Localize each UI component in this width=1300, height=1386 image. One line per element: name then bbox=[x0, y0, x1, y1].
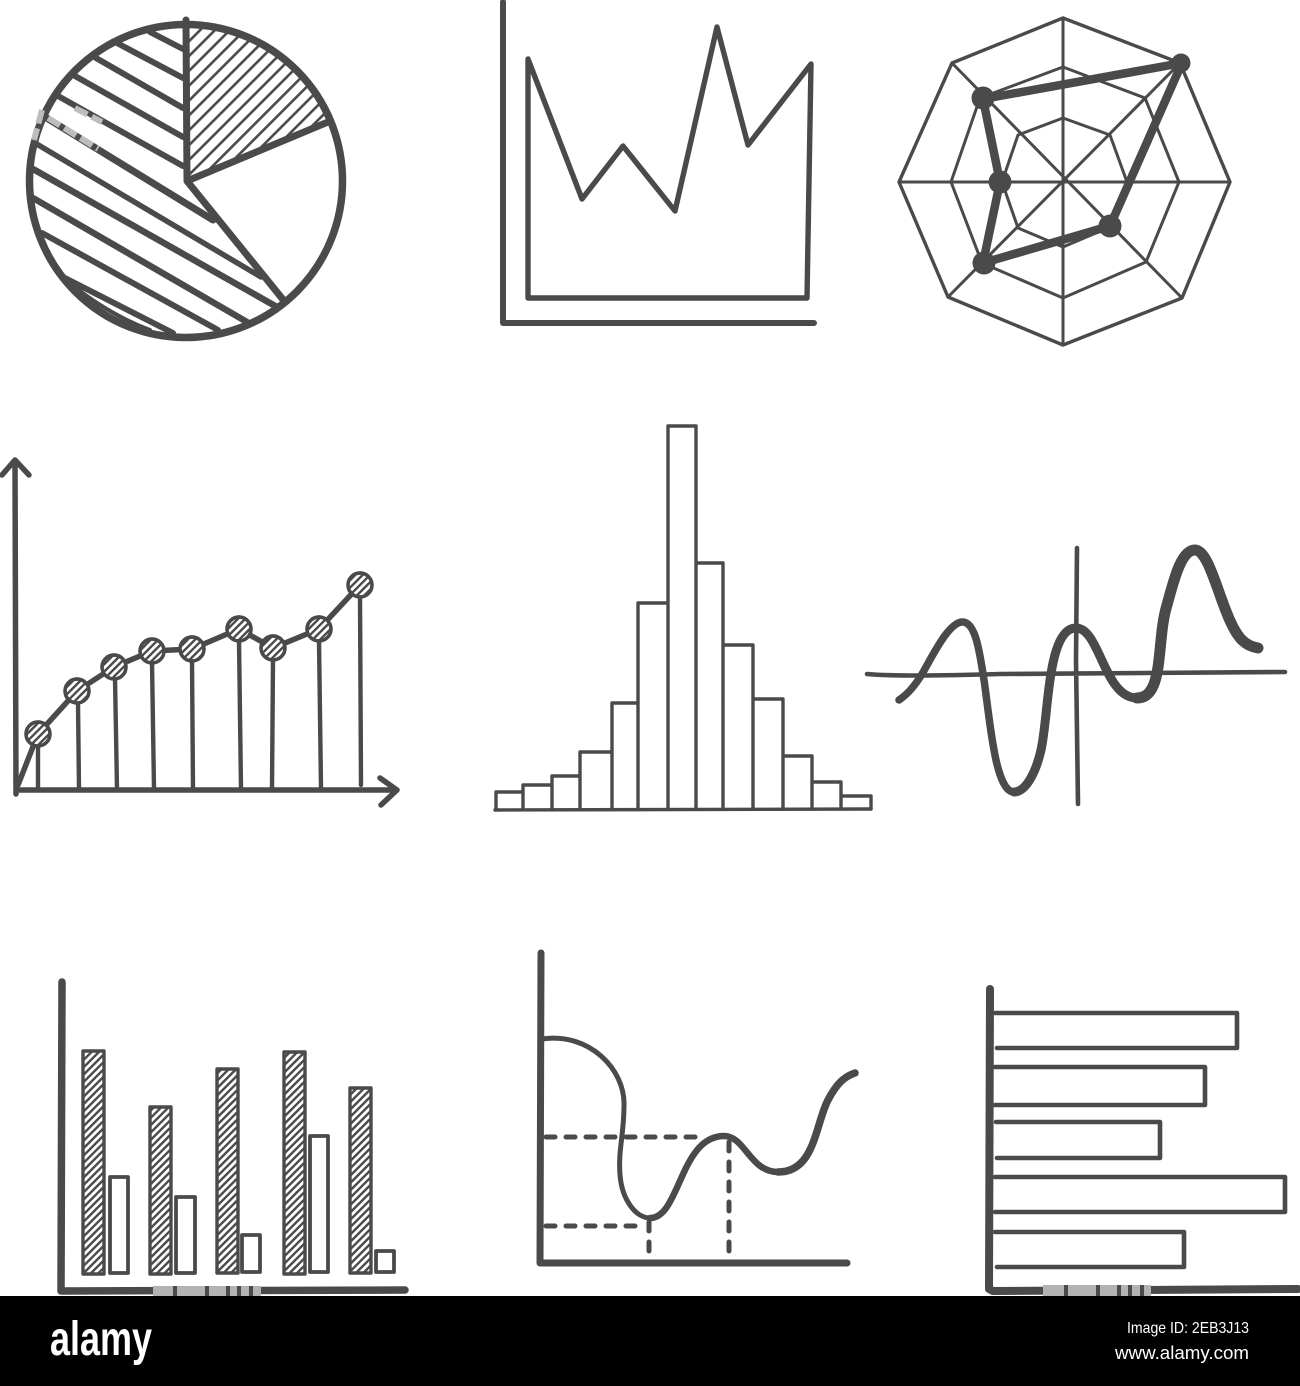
radar: data polygon bbox=[983, 63, 1182, 263]
area chart bbox=[503, 2, 814, 323]
curve chart: dashed guides bbox=[546, 1137, 729, 1262]
radar: middle ring bbox=[951, 67, 1179, 298]
histogram: baseline bbox=[495, 809, 871, 810]
dot chart: axes with arrows bbox=[2, 460, 397, 805]
website: www.alamy.com bbox=[1114, 1343, 1249, 1363]
image id: Image ID: 2EB3J13 bbox=[1127, 1320, 1249, 1337]
pie: hatched slice bbox=[186, 22, 328, 181]
dot line chart with stems bbox=[2, 460, 397, 805]
radar: data points bbox=[972, 54, 1190, 274]
horizontal bar chart bbox=[989, 989, 1298, 1291]
pie: slice dividers bbox=[186, 20, 328, 302]
pie: outer circle bbox=[30, 24, 342, 338]
grouped bar chart bbox=[61, 982, 405, 1291]
histogram bbox=[495, 426, 871, 810]
pie: watermark fragment bbox=[34, 108, 102, 149]
wave: curve bbox=[899, 550, 1258, 792]
wave chart bbox=[867, 548, 1285, 804]
dot chart: hatched data points bbox=[26, 573, 372, 746]
logo: alamy bbox=[50, 1313, 152, 1366]
grouped bars: hollow bars bbox=[110, 1136, 394, 1273]
wave: axes bbox=[867, 548, 1285, 804]
radar: inner ring bbox=[1002, 118, 1127, 247]
histogram: bars bbox=[496, 426, 871, 809]
footer band bbox=[0, 1285, 1300, 1386]
pie: wide diagonal stripes bbox=[33, 32, 277, 333]
curve chart with dashed guides bbox=[540, 953, 855, 1263]
area chart: axes bbox=[503, 2, 814, 323]
radar chart bbox=[899, 18, 1230, 345]
radar: outer ring bbox=[899, 18, 1230, 345]
axis watermark fragments bbox=[153, 1285, 1151, 1296]
grouped bars: hatched bars bbox=[83, 1051, 371, 1274]
curve chart: axes bbox=[540, 953, 847, 1263]
dot chart: trend line bbox=[18, 585, 360, 785]
horizontal bars: axes bbox=[989, 989, 1298, 1291]
curve chart: curve bbox=[542, 1038, 855, 1218]
grouped bars: axes bbox=[61, 982, 405, 1291]
area chart: jagged outline bbox=[528, 27, 811, 298]
dot chart: stems bbox=[38, 596, 361, 789]
radar: spokes bbox=[899, 18, 1230, 345]
pie chart bbox=[30, 20, 342, 338]
horizontal bars: bars bbox=[995, 1013, 1285, 1267]
